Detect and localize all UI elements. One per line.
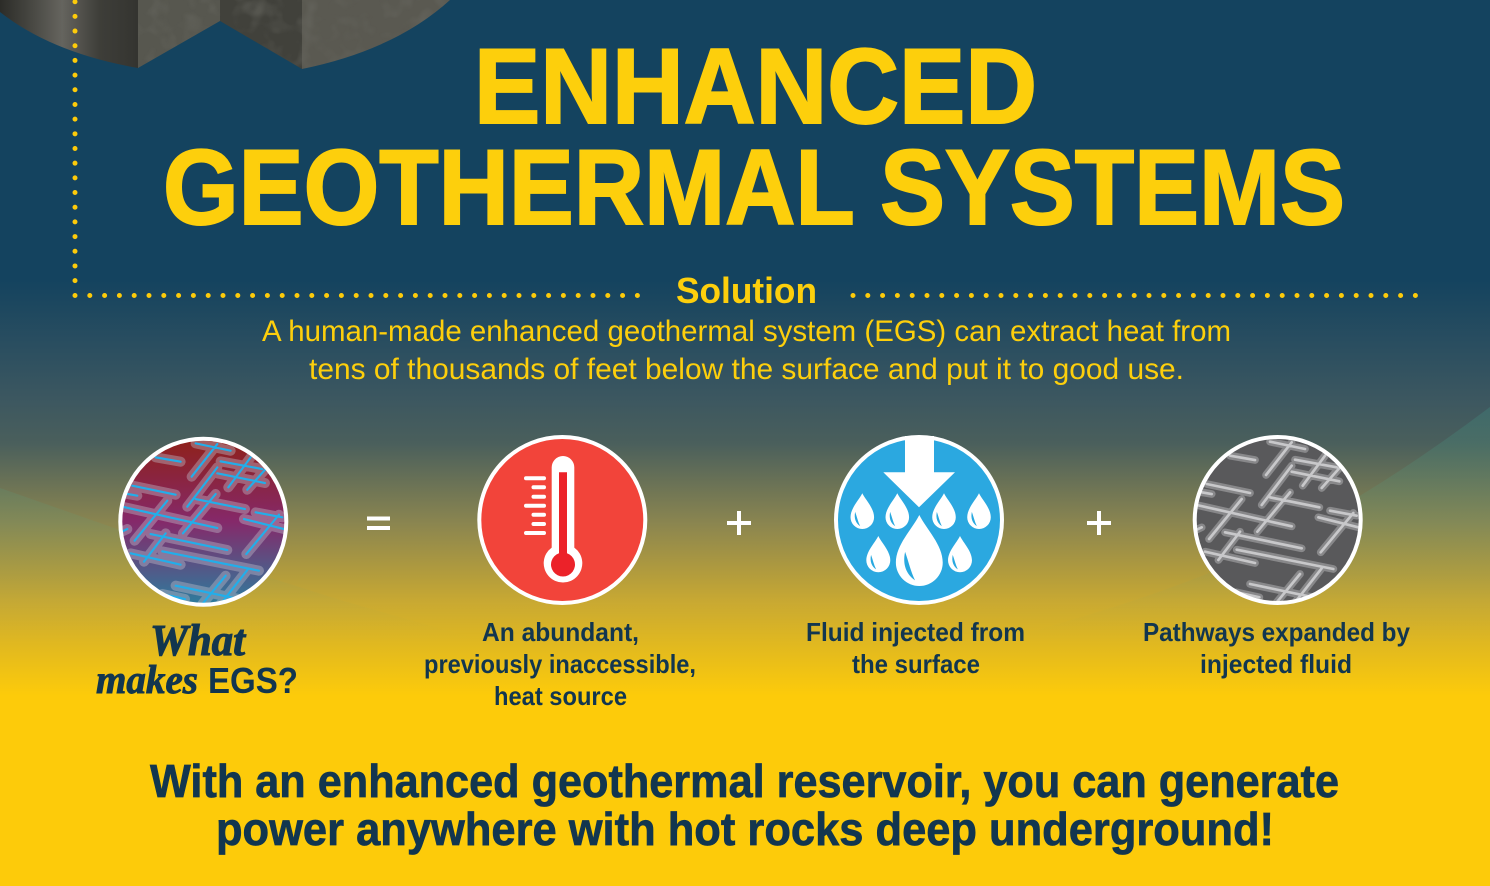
closing statement bbox=[150, 755, 1339, 855]
plus sign bbox=[1087, 511, 1111, 535]
label: heat source: previously inaccessible, bbox=[424, 649, 696, 679]
label: heat source bbox=[424, 617, 696, 711]
title: GEOTHERMAL SYSTEMS bbox=[163, 127, 1345, 247]
what makes EGS heading: makes bbox=[96, 657, 198, 702]
what makes EGS heading bbox=[96, 616, 298, 702]
icon: thermometer bbox=[479, 437, 645, 603]
plus sign bbox=[727, 511, 751, 535]
background earth band bbox=[0, 407, 1490, 640]
icon: fluid injection bbox=[836, 436, 1002, 603]
label: expanded pathways: Pathways expanded by bbox=[1143, 617, 1410, 647]
label: heat source: heat source bbox=[494, 681, 627, 711]
solution heading: Solution bbox=[676, 270, 817, 311]
what makes EGS heading: What bbox=[150, 616, 247, 665]
closing statement: power anywhere with hot rocks deep underground! bbox=[216, 803, 1274, 855]
dotted connector line bbox=[75, 2, 1418, 295]
icon: expanded pathways bbox=[1192, 435, 1364, 605]
title bbox=[163, 26, 1345, 247]
solution description bbox=[262, 315, 1231, 386]
what makes EGS heading: EGS? bbox=[208, 660, 298, 701]
label: injected fluid bbox=[806, 617, 1025, 679]
closing statement: With an enhanced geothermal reservoir, you can generate bbox=[150, 755, 1339, 807]
label: injected fluid: the surface bbox=[852, 649, 980, 679]
label: heat source: An abundant, bbox=[482, 617, 639, 647]
icon: EGS fracture network bbox=[118, 437, 288, 607]
label: expanded pathways: injected fluid bbox=[1200, 649, 1352, 679]
rock core illustration bbox=[0, 0, 452, 70]
label: expanded pathways bbox=[1143, 617, 1410, 679]
solution description: tens of thousands of feet below the surface and put it to good use. bbox=[309, 353, 1184, 386]
title: ENHANCED bbox=[474, 26, 1037, 146]
label: injected fluid: Fluid injected from bbox=[806, 617, 1025, 647]
solution description: A human-made enhanced geothermal system (EGS) can extract heat from bbox=[262, 315, 1231, 348]
equals sign bbox=[367, 516, 390, 530]
